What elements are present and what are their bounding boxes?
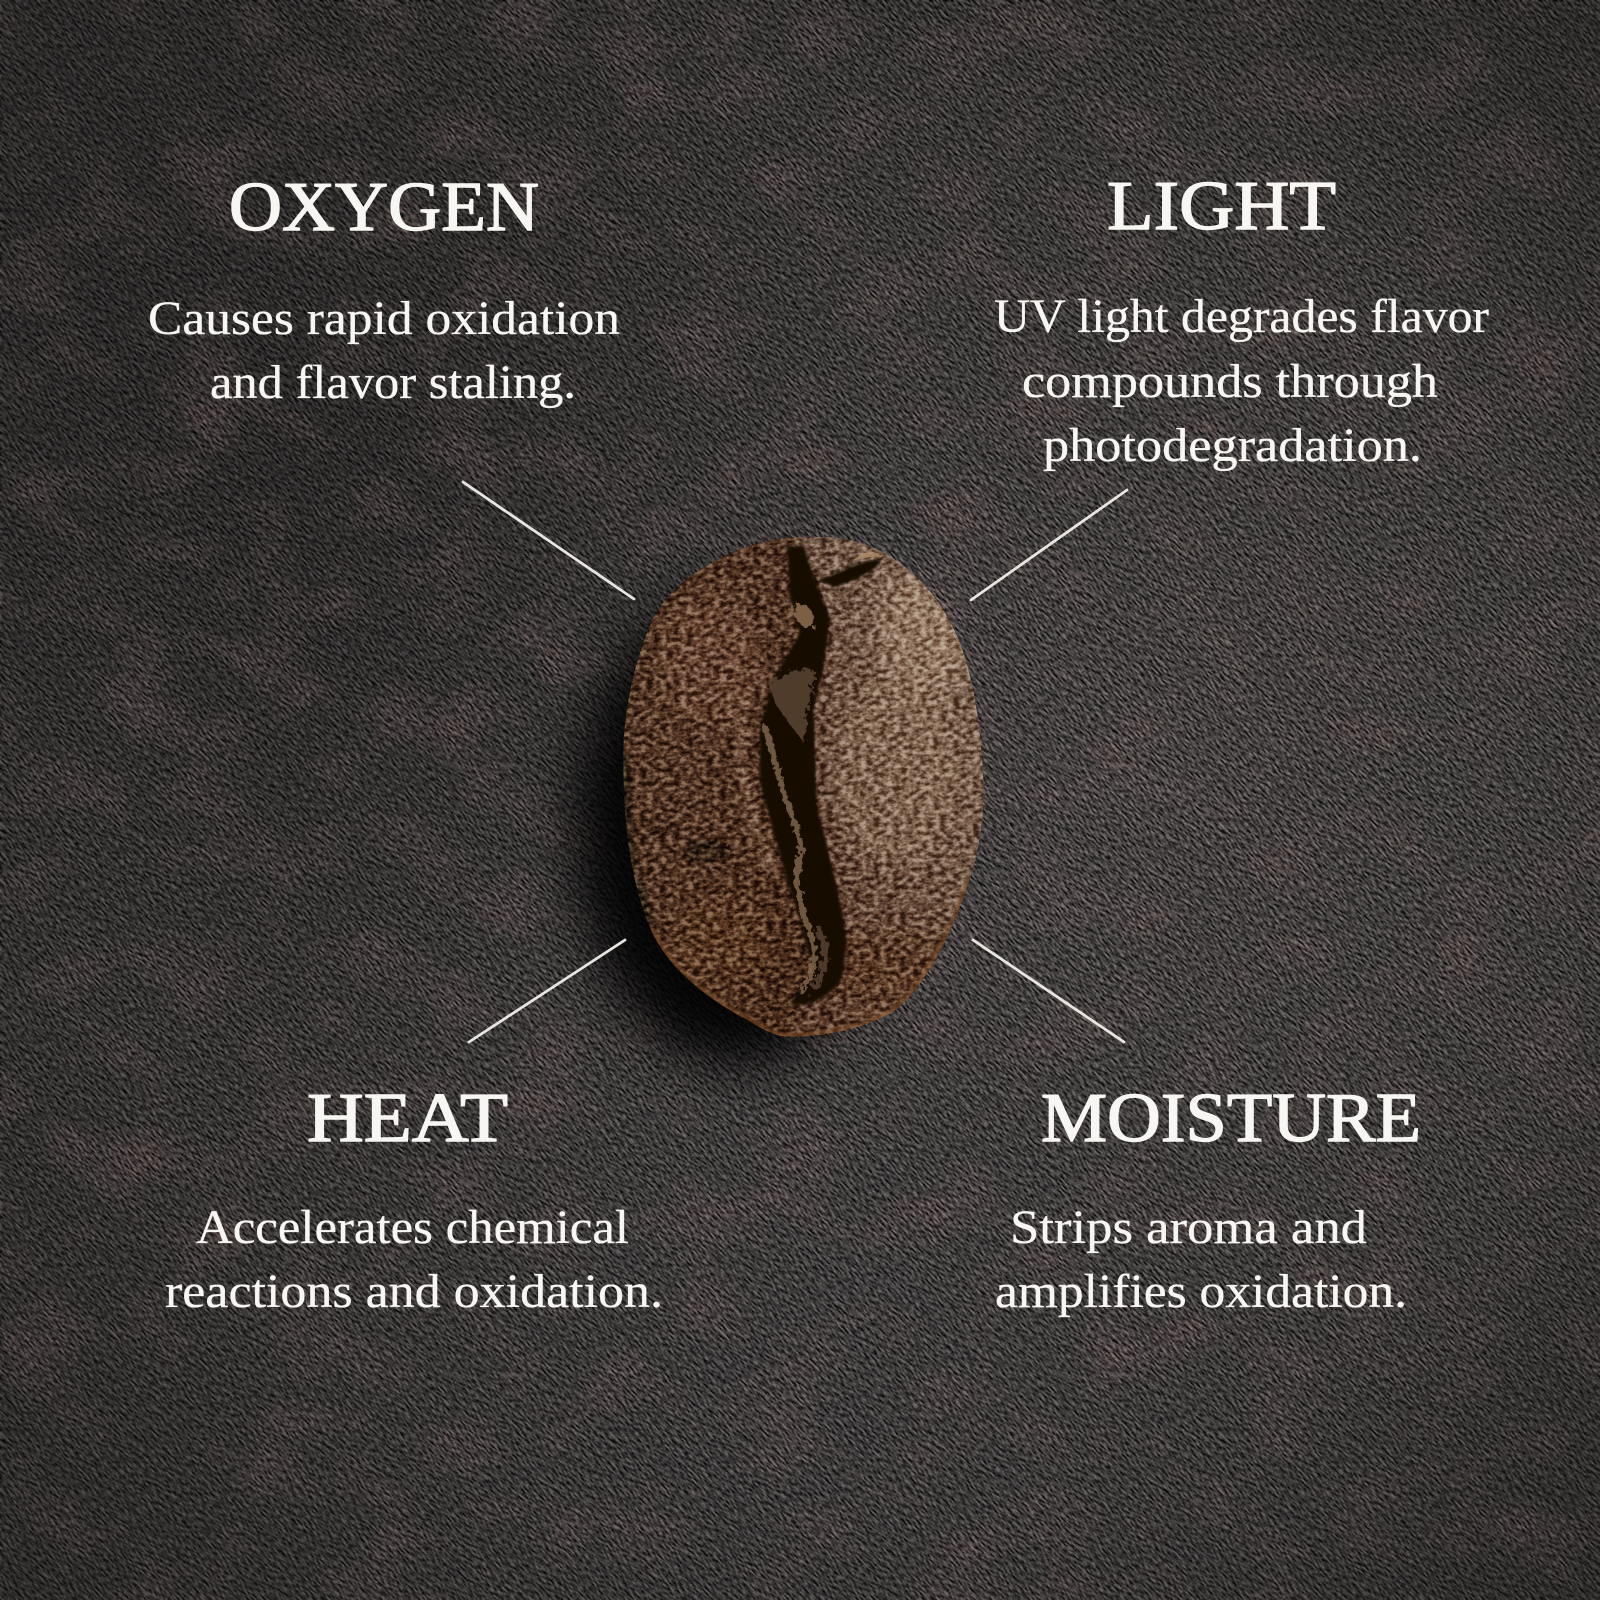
right lobe lower shade [820,932,967,1008]
dark blotches [683,841,730,862]
text block: light description [994,290,1489,472]
right lobe [790,536,984,1036]
connector line: oxygen [463,482,634,599]
heading: light: LIGHT [1107,168,1336,245]
connector line: moisture [973,940,1124,1042]
text block: oxygen description: and flavor staling. [210,356,576,409]
text block: light description: compounds through [1022,355,1438,408]
heading: oxygen: OXYGEN [229,169,539,246]
text block: heat description: reactions and oxidation. [165,1265,663,1318]
connector line: heat [469,940,625,1042]
text block: oxygen description [148,292,620,409]
text block: heat description [165,1201,663,1318]
bean skin texture [593,518,1010,1062]
bean base [760,537,847,1036]
text block: moisture description [995,1201,1407,1318]
text block: light description: photodegradation. [1043,419,1422,472]
text block: moisture description: amplifies oxidation. [995,1265,1407,1318]
text block: heat description: Accelerates chemical [196,1201,629,1254]
top pinch highlight [853,552,882,560]
panel: light [994,168,1489,472]
connector line: light [971,490,1127,600]
left lobe lower warm patch [670,897,770,981]
panel: heat [165,1080,663,1318]
panel: moisture [995,1080,1421,1318]
top pinch [820,560,882,587]
crease lighter tissue [768,670,817,744]
text block: light description: UV light degrades flavor [994,290,1489,343]
heading: moisture: MOISTURE [1041,1080,1421,1157]
left lobe [624,538,806,1030]
text block: moisture description: Strips aroma and [1010,1201,1367,1254]
heading: heat: HEAT [307,1080,508,1157]
panel: oxygen [148,169,620,409]
crease tissue strand [764,725,825,993]
warm rim [650,878,970,1037]
right lobe highlight [877,568,970,698]
upper crease notch [793,604,814,628]
dark edge on left [623,756,650,928]
right lobe mid glow [833,671,960,870]
left lobe highlight [660,595,760,725]
crease [760,545,847,1005]
coffee bean [623,536,984,1037]
bean shadow [575,595,895,1065]
text block: oxygen description: Causes rapid oxidation [148,292,620,345]
left lobe inner ridge [742,694,773,874]
